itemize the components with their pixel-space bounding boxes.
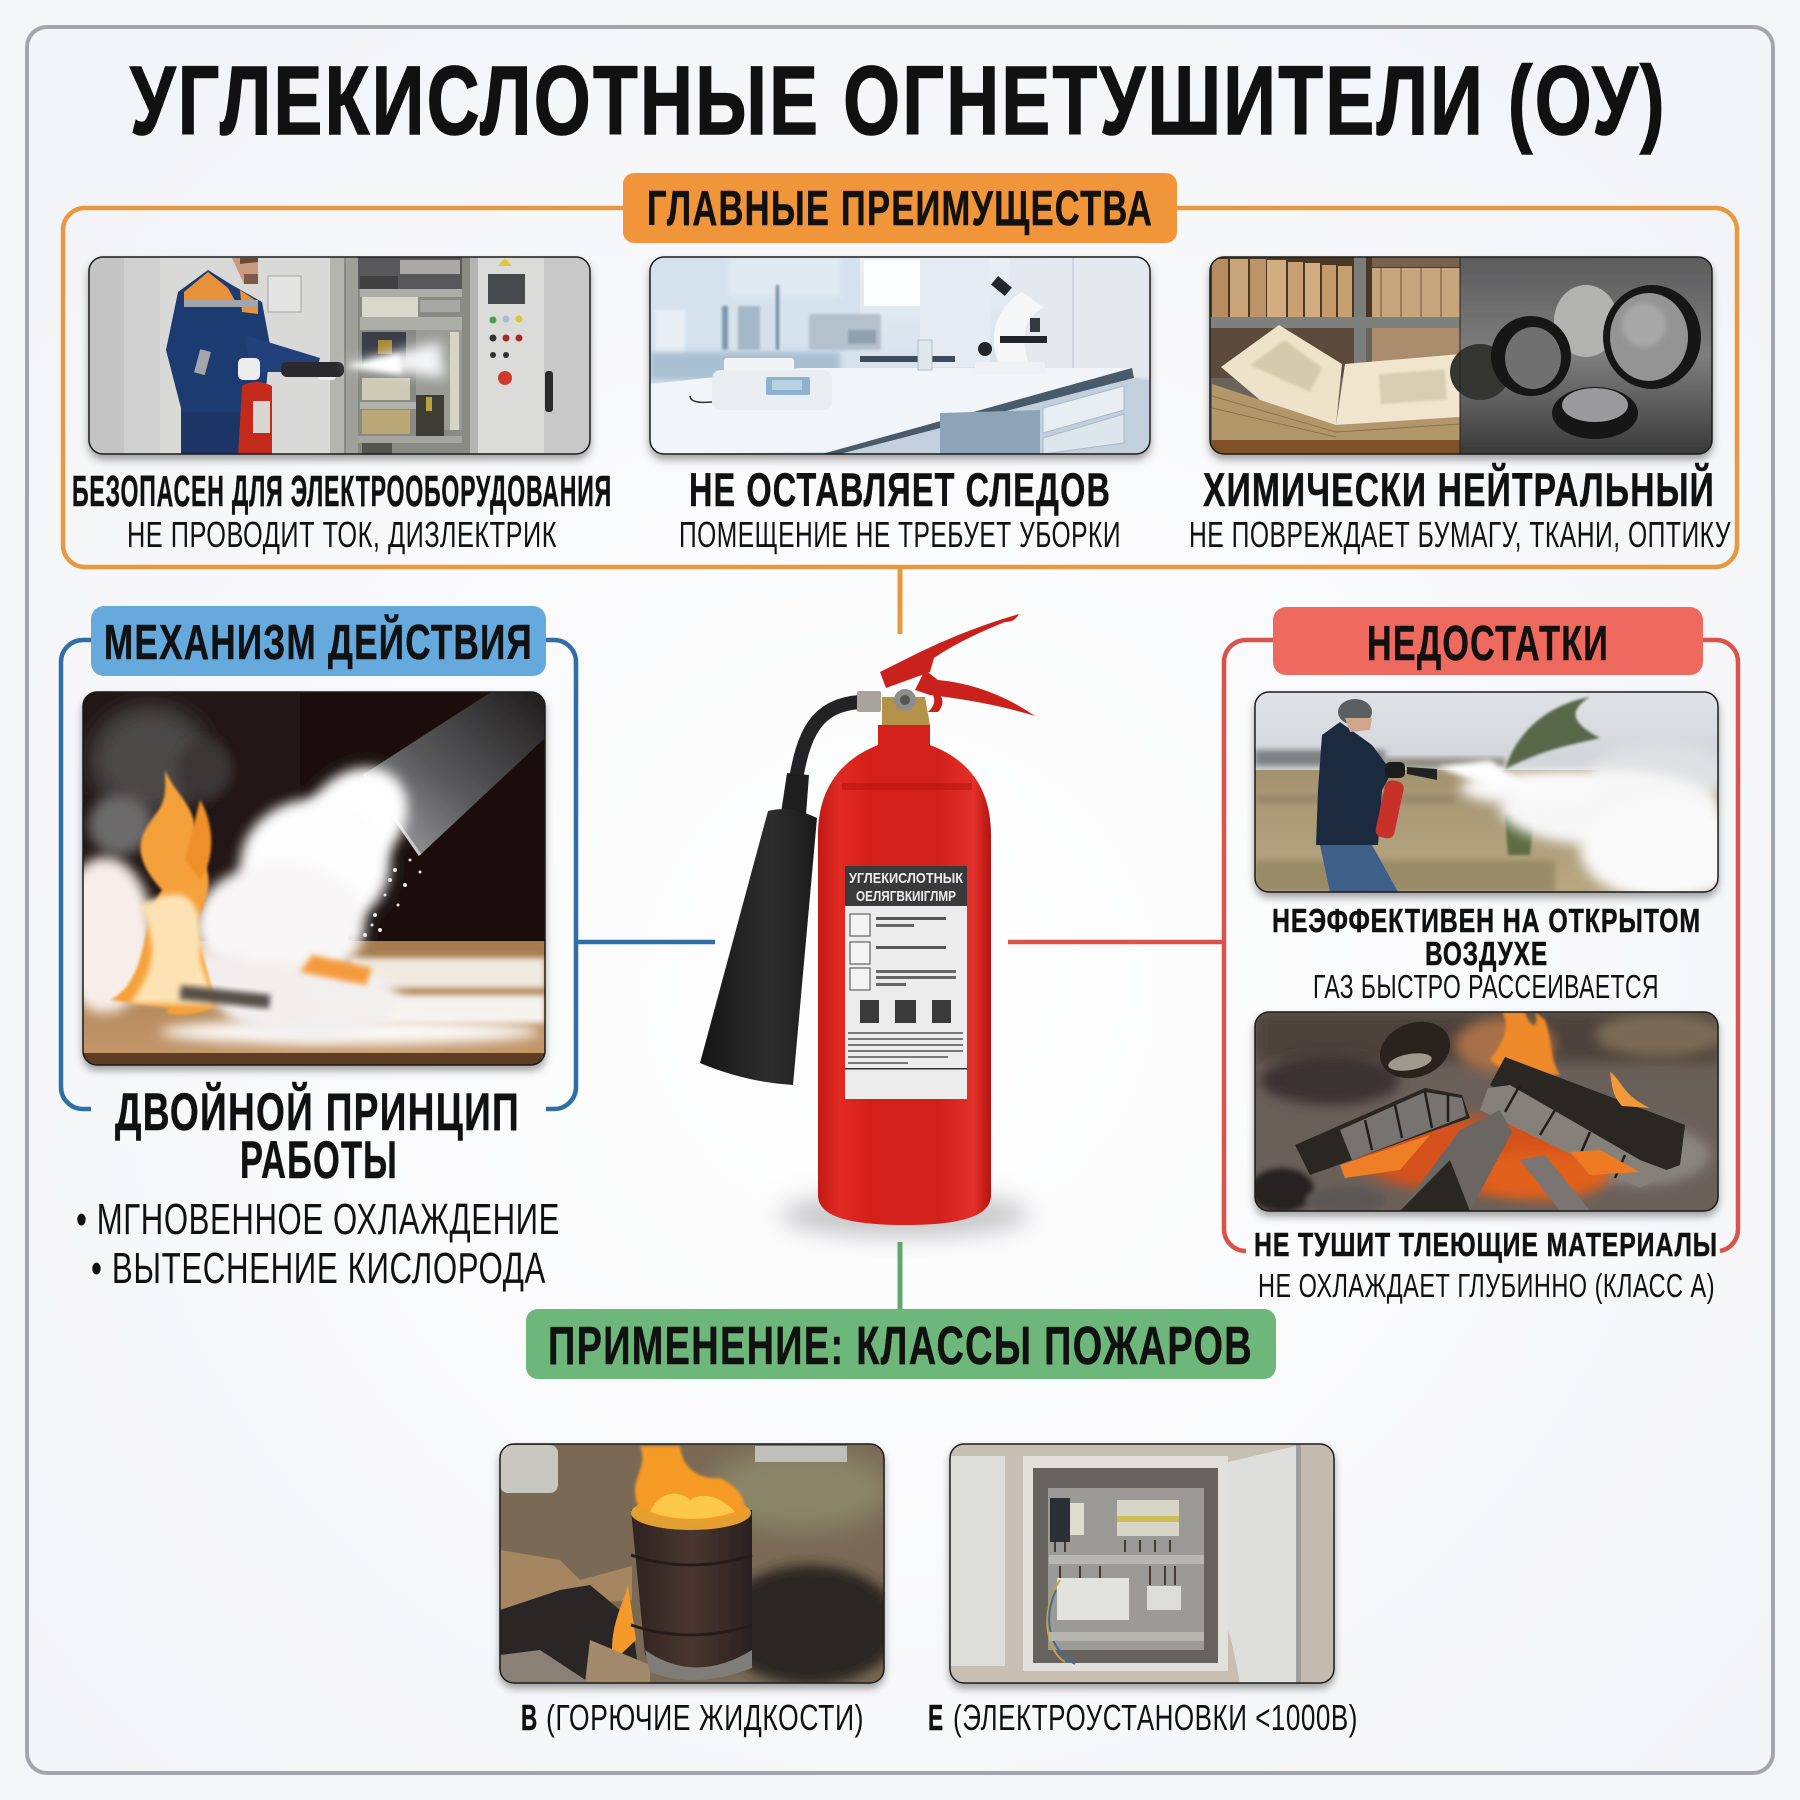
photo: worker extinguishing electrical cabinet bbox=[89, 257, 590, 457]
label: УГЛЕКИСЛОТНЫК bbox=[849, 870, 964, 887]
bracket: drawbacks bbox=[1224, 640, 1738, 1251]
heading: mechanism bbox=[91, 606, 546, 676]
bracket: mechanism bbox=[61, 640, 576, 1109]
trigger levers bbox=[880, 614, 1035, 716]
class E caption bbox=[928, 1697, 1358, 1738]
cylinder bbox=[818, 725, 991, 1225]
advantage 2 text bbox=[679, 463, 1121, 555]
photo: book and optical lenses bbox=[1210, 257, 1712, 454]
heading: application: ПРИМЕНЕНИЕ: КЛАССЫ ПОЖАРОВ bbox=[548, 1316, 1253, 1376]
heading: application bbox=[526, 1309, 1276, 1379]
horn connector bbox=[781, 773, 809, 815]
panel border bbox=[63, 208, 1737, 567]
advantage 1 text: НЕ ПРОВОДИТ ТОК, ДИЗЛЕКТРИК bbox=[127, 514, 557, 555]
photo: clean laboratory bbox=[650, 257, 1150, 454]
photo: open electrical panel bbox=[950, 1444, 1334, 1683]
mechanism bullet list: • МГНОВЕННОЕ ОХЛАЖДЕНИЕ bbox=[76, 1195, 560, 1244]
icon: central CO2 extinguisher bbox=[700, 614, 1035, 1237]
mechanism subheading: ДВОЙНОЙ ПРИНЦИП bbox=[115, 1081, 520, 1142]
connector: advantages to extinguisher bbox=[898, 567, 902, 634]
class B caption: (ГОРЮЧИЕ ЖИДКОСТИ) bbox=[546, 1697, 864, 1738]
class B caption bbox=[521, 1697, 864, 1738]
mechanism bullet list bbox=[76, 1195, 560, 1293]
advantage 1 text: БЕЗОПАСЕН ДЛЯ ЭЛЕКТРООБОРУДОВАНИЯ bbox=[72, 467, 612, 516]
advantage 2 text: НЕ ОСТАВЛЯЕТ СЛЕДОВ bbox=[689, 463, 1111, 516]
connector: mechanism to extinguisher bbox=[576, 940, 715, 944]
connector: extinguisher to fire classes bbox=[898, 1242, 902, 1310]
embossed band bbox=[842, 783, 972, 790]
class B caption: В bbox=[521, 1697, 538, 1738]
photo: smouldering logs bbox=[1250, 1012, 1725, 1214]
mechanism bullet list: • ВЫТЕСНЕНИЕ КИСЛОРОДА bbox=[91, 1244, 546, 1293]
mechanism subheading bbox=[115, 1081, 520, 1190]
valve bbox=[857, 689, 930, 725]
advantage 3 text bbox=[1189, 463, 1731, 555]
class E caption: (ЭЛЕКТРОУСТАНОВКИ <1000В) bbox=[953, 1697, 1358, 1738]
heading: mechanism: МЕХАНИЗМ ДЕЙСТВИЯ bbox=[104, 615, 533, 670]
panel: fire classes bbox=[500, 1309, 1358, 1738]
heading: advantages: ГЛАВНЫЕ ПРЕИМУЩЕСТВА bbox=[647, 182, 1153, 236]
photo: man using extinguisher in wind bbox=[1255, 692, 1750, 900]
connector: drawbacks to extinguisher bbox=[1008, 940, 1224, 944]
heading: advantages bbox=[623, 173, 1177, 243]
hose bbox=[795, 702, 860, 785]
label bbox=[845, 866, 967, 1099]
photo: burning barrel bbox=[500, 1444, 900, 1685]
class E caption: Е bbox=[928, 1697, 944, 1738]
heading: drawbacks bbox=[1273, 607, 1703, 675]
drawback 1 text: ГАЗ БЫСТРО РАССЕИВАЕТСЯ bbox=[1313, 968, 1659, 1005]
advantage 2 text: ПОМЕЩЕНИЕ НЕ ТРЕБУЕТ УБОРКИ bbox=[679, 514, 1121, 555]
heading: drawbacks: НЕДОСТАТКИ bbox=[1367, 617, 1609, 671]
panel: advantages bbox=[63, 173, 1737, 567]
panel: mechanism of action bbox=[57, 606, 576, 1293]
panel: drawbacks bbox=[1224, 607, 1750, 1304]
drawback 1 text bbox=[1272, 902, 1701, 1005]
floor shadow bbox=[780, 1193, 1030, 1237]
drawback 1 text: ВОЗДУХЕ bbox=[1425, 935, 1548, 972]
horn bbox=[700, 809, 817, 1085]
photo: CO2 discharge onto flame bbox=[57, 692, 545, 1065]
drawback 2 text bbox=[1254, 1226, 1718, 1304]
advantage 1 text bbox=[72, 467, 612, 555]
label: ОЕЛЯГВКИІГЛМР bbox=[856, 888, 956, 905]
mechanism subheading: РАБОТЫ bbox=[240, 1131, 398, 1190]
